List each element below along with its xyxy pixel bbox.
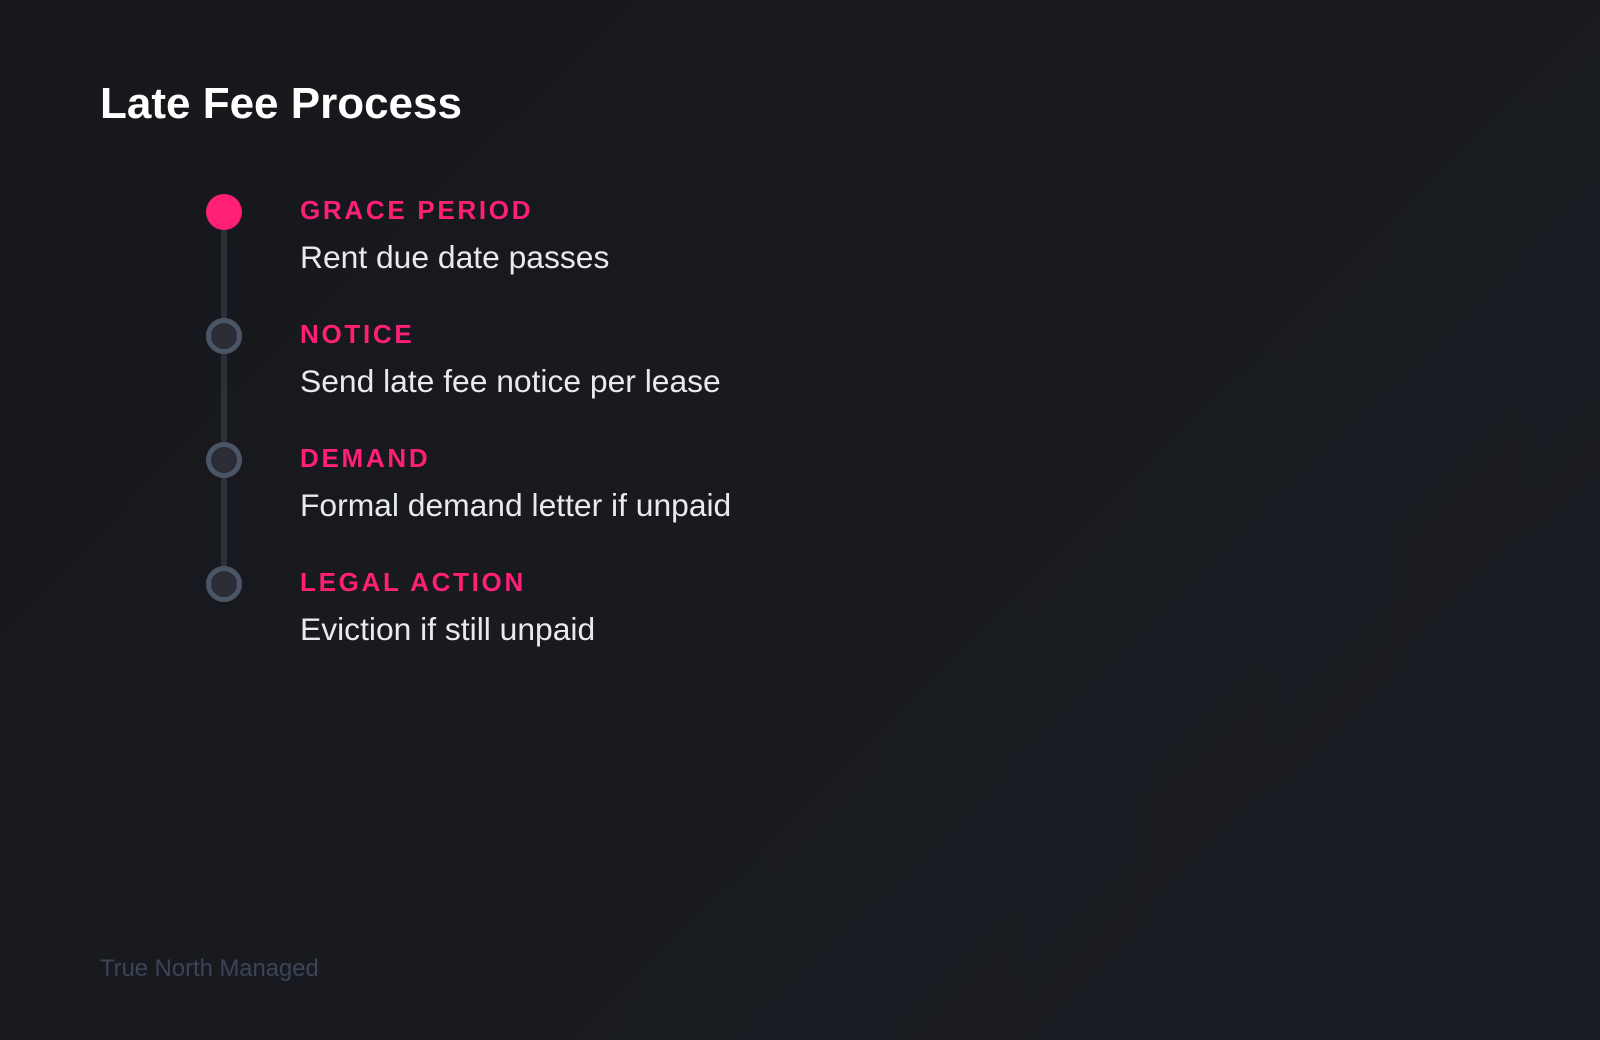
description: Rent due date passes: [300, 239, 609, 275]
label: LEGAL ACTION: [300, 567, 526, 597]
icon: inactive dot: [206, 566, 242, 602]
label: GRACE PERIOD: [300, 195, 533, 225]
step 4: legal action: [206, 566, 595, 647]
label: NOTICE: [300, 319, 414, 349]
footer: True North Managed: [100, 955, 319, 982]
step 3: demand: [206, 442, 731, 523]
icon: active dot: [206, 194, 242, 230]
icon: inactive dot: [206, 442, 242, 478]
timeline connector: [221, 212, 227, 584]
step 1: grace period: [206, 194, 609, 275]
icon: inactive dot: [206, 318, 242, 354]
step 2: notice: [206, 318, 721, 399]
description: Formal demand letter if unpaid: [300, 487, 731, 523]
description: Eviction if still unpaid: [300, 611, 595, 647]
label: DEMAND: [300, 443, 430, 473]
title: Late Fee Process: [100, 79, 462, 128]
description: Send late fee notice per lease: [300, 363, 721, 399]
